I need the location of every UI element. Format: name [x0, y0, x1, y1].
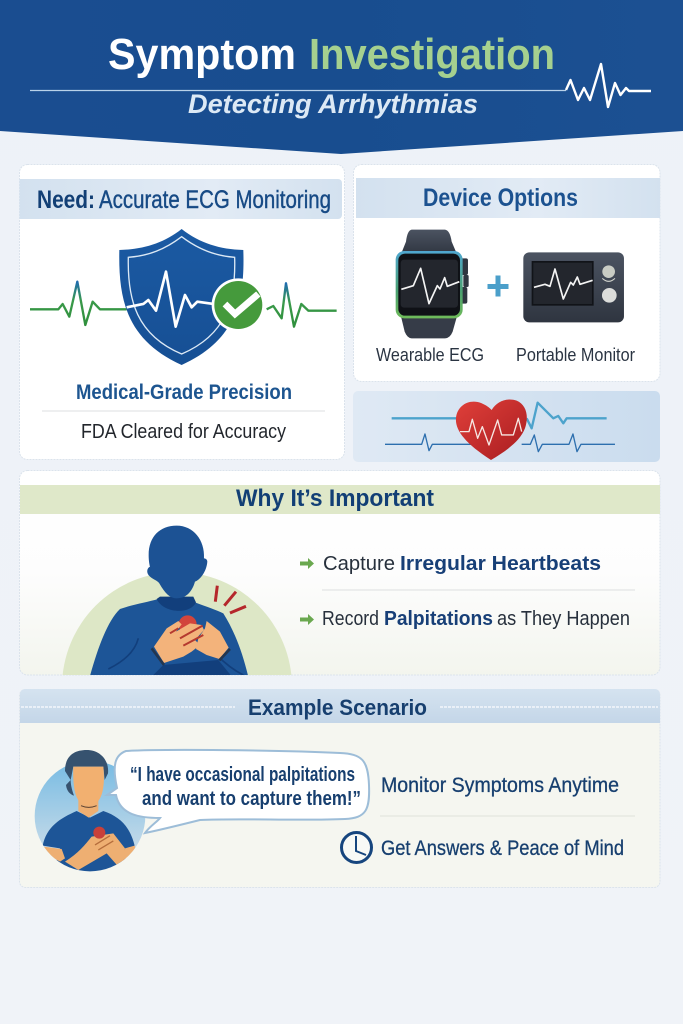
text: monitor symptoms anytime: Monitor Symptoms Anytime: [381, 774, 619, 797]
illustration: person with hand on chest: [35, 750, 145, 872]
text: capture irregular heartbeats: [323, 553, 601, 575]
text: record palpitations: Record: [322, 608, 379, 630]
text: capture irregular heartbeats: Capture: [323, 553, 395, 575]
panel: heart illustration: [353, 391, 660, 462]
heading band: [356, 178, 660, 218]
text: FDA cleared: FDA Cleared for Accuracy: [81, 421, 286, 443]
icon: heart with ecg lines: [385, 400, 615, 460]
heading band: [20, 485, 660, 514]
panel: example scenario: [20, 689, 660, 888]
label: portable monitor: Portable Monitor: [516, 345, 635, 365]
heading band: Device Options: [423, 184, 578, 212]
text: get answers: Get Answers & Peace of Mind: [381, 837, 624, 860]
text: capture irregular heartbeats: Irregular Heartbeats: [400, 553, 601, 575]
icon: portable monitor: [523, 252, 624, 322]
panel: need accurate ECG monitoring: [20, 164, 344, 460]
heading band: Example Scenario: [248, 695, 427, 720]
text: medical-grade precision: Medical-Grade Precision: [76, 381, 292, 404]
icon: smartwatch: [396, 230, 469, 338]
text: record palpitations: [322, 608, 630, 630]
label: wearable ECG: Wearable ECG: [376, 345, 484, 365]
heading band: [20, 689, 660, 723]
heading band: Why It’s Important: [236, 485, 434, 512]
icon: clock: [342, 832, 372, 862]
panel: why it's important: [19, 470, 660, 676]
title: [108, 30, 555, 79]
heading band: [20, 179, 342, 219]
title: Symptom: [108, 30, 296, 79]
speech bubble with quote: “I have occasional palpitations: [130, 764, 355, 786]
arrow bullet 1: [300, 558, 314, 569]
icon: shield with heartbeat and check: [30, 229, 337, 365]
header banner: [0, 0, 683, 154]
arrow bullet 2: [300, 614, 314, 625]
icon: plus: [488, 276, 508, 296]
panel: device options: [354, 164, 660, 382]
heading band: Need:: [37, 186, 95, 214]
speech bubble with quote: and want to capture them!”: [142, 788, 361, 810]
title: Investigation: [309, 30, 555, 79]
illustration: person holding chest: [62, 526, 292, 675]
text: record palpitations: as They Happen: [497, 608, 630, 630]
subtitle: Detecting Arrhythmias: [188, 89, 478, 119]
heartbeat line: [30, 64, 651, 107]
speech bubble with quote: [107, 750, 369, 833]
text: record palpitations: Palpitations: [384, 608, 493, 630]
heading band: Accurate ECG Monitoring: [99, 186, 331, 214]
